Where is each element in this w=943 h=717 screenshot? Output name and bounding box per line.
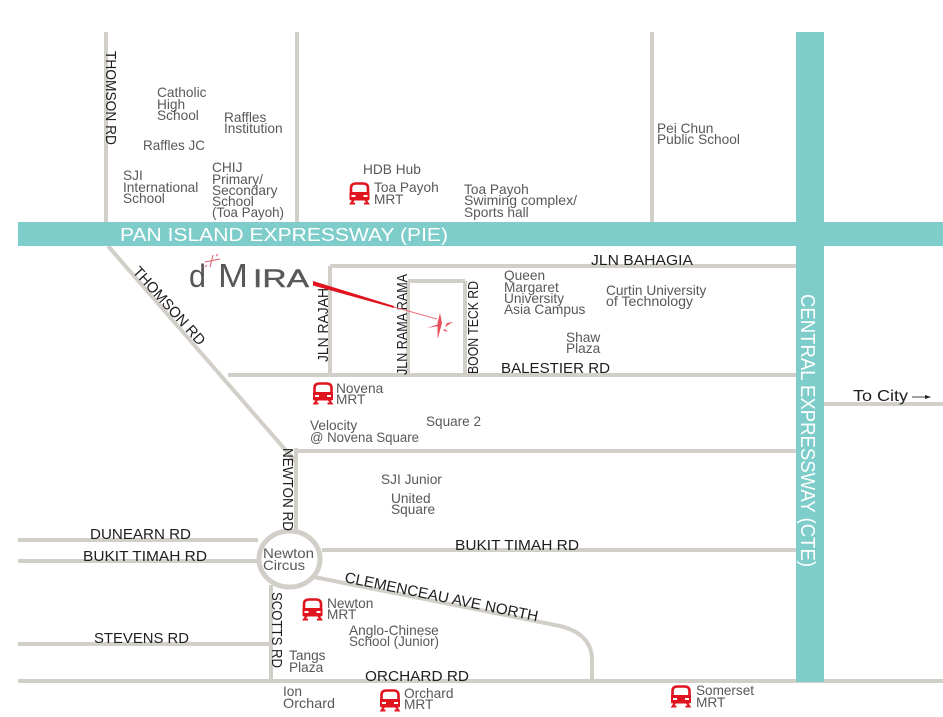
places south of PIE: Plaza: [289, 660, 324, 675]
road labels: BOON TECK RD: [465, 281, 482, 374]
label: To City: [853, 388, 931, 405]
places south of PIE: Shaw: [566, 330, 600, 345]
icon: Newton MRT: [302, 600, 322, 620]
road labels: STEVENS RD: [94, 630, 189, 647]
road labels: DUNEARN RD: [90, 526, 191, 543]
junction: Newton Circus: Newton: [263, 546, 314, 561]
places south of PIE: Anglo-Chinese: [349, 623, 439, 638]
places south of PIE: Curtin University: [606, 283, 707, 298]
places north of PIE: (Toa Payoh): [212, 205, 284, 220]
road labels: [83, 51, 693, 685]
junction: Newton Circus: Circus: [263, 558, 305, 573]
places south of PIE: Orchard: [404, 686, 453, 701]
logo: d'Mira: d: [189, 258, 206, 294]
road labels: JLN RAMA RAMA: [394, 274, 411, 375]
icon: Toa Payoh MRT: [350, 184, 370, 204]
places north of PIE: Raffles JC: [143, 138, 205, 153]
places north of PIE: School: [123, 191, 165, 206]
road labels: JLN RAJAH: [315, 288, 332, 362]
logo: d'Mira: IRA: [253, 265, 309, 293]
road labels: NEWTON RD: [279, 448, 296, 531]
places south of PIE: Square: [391, 502, 435, 517]
road labels: ORCHARD RD: [365, 668, 469, 685]
places south of PIE: @ Novena Square: [310, 430, 419, 445]
places south of PIE: Novena: [336, 381, 384, 396]
places south of PIE: Somerset: [696, 683, 754, 698]
icon: Orchard MRT: [380, 690, 400, 710]
places north of PIE: HDB Hub: [363, 162, 421, 177]
logo: d'Mira: M: [218, 257, 248, 294]
icon: Novena MRT: [313, 384, 333, 404]
road labels: JLN BAHAGIA: [591, 252, 693, 269]
places south of PIE: [283, 268, 754, 712]
places south of PIE: University: [504, 291, 564, 306]
road labels: BUKIT TIMAH RD: [83, 548, 207, 565]
places north of PIE: Toa Payoh: [464, 182, 529, 197]
road labels: BALESTIER RD: [501, 360, 610, 377]
places north of PIE: MRT: [374, 192, 404, 207]
places north of PIE: Secondary: [212, 183, 278, 198]
places south of PIE: MRT: [336, 392, 366, 407]
icon: Somerset MRT: [671, 686, 691, 706]
places north of PIE: Primary/: [212, 172, 263, 187]
places south of PIE: Square 2: [426, 414, 481, 429]
places north of PIE: [123, 85, 740, 220]
places south of PIE: Plaza: [566, 341, 601, 356]
places south of PIE: Tangs: [289, 648, 326, 663]
label: To City: To City: [853, 388, 908, 405]
places north of PIE: High: [157, 97, 185, 112]
expressway: CTE: CENTRAL EXPRESSWAY (CTE): [796, 294, 818, 567]
places north of PIE: School: [157, 108, 199, 123]
places north of PIE: Pei Chun: [657, 121, 713, 136]
places south of PIE: Margaret: [504, 280, 559, 295]
places north of PIE: SJI: [123, 168, 143, 183]
places south of PIE: MRT: [327, 607, 357, 622]
junction: Newton Circus: [259, 531, 320, 587]
places north of PIE: Raffles: [224, 110, 267, 125]
places south of PIE: MRT: [404, 697, 434, 712]
expressway: PIE: PAN ISLAND EXPRESSWAY (PIE): [120, 224, 448, 245]
icon: site star marker: [427, 313, 453, 338]
places north of PIE: Swiming complex/: [464, 193, 577, 208]
pointer line: [394, 307, 437, 319]
places north of PIE: International: [123, 180, 198, 195]
places south of PIE: Ion: [283, 684, 302, 699]
places north of PIE: Toa Payoh: [374, 180, 439, 195]
thick pointer segment: [313, 281, 394, 308]
places south of PIE: Velocity: [310, 418, 357, 433]
places south of PIE: Orchard: [283, 696, 335, 711]
places south of PIE: United: [391, 491, 431, 506]
places south of PIE: SJI Junior: [381, 472, 442, 487]
places north of PIE: Sports hall: [464, 205, 529, 220]
logo: d'Mira: [189, 254, 309, 294]
places north of PIE: Public School: [657, 132, 740, 147]
expressway: CTE: [796, 32, 824, 682]
expressway: PIE: [18, 222, 943, 246]
places north of PIE: Institution: [224, 121, 283, 136]
places north of PIE: Catholic: [157, 85, 207, 100]
places south of PIE: Asia Campus: [504, 302, 586, 317]
road labels: THOMSON RD: [129, 263, 209, 349]
places south of PIE: Newton: [327, 596, 373, 611]
places south of PIE: of Technology: [606, 294, 693, 309]
places south of PIE: Queen: [504, 268, 545, 283]
places north of PIE: CHIJ: [212, 160, 242, 175]
road labels: SCOTTS RD: [268, 592, 285, 668]
road labels: CLEMENCEAU AVE NORTH: [343, 569, 540, 625]
road labels: THOMSON RD: [102, 51, 119, 145]
places north of PIE: School: [212, 194, 254, 209]
road labels: BUKIT TIMAH RD: [455, 537, 579, 554]
places south of PIE: MRT: [696, 695, 726, 710]
places south of PIE: School (Junior): [349, 634, 439, 649]
